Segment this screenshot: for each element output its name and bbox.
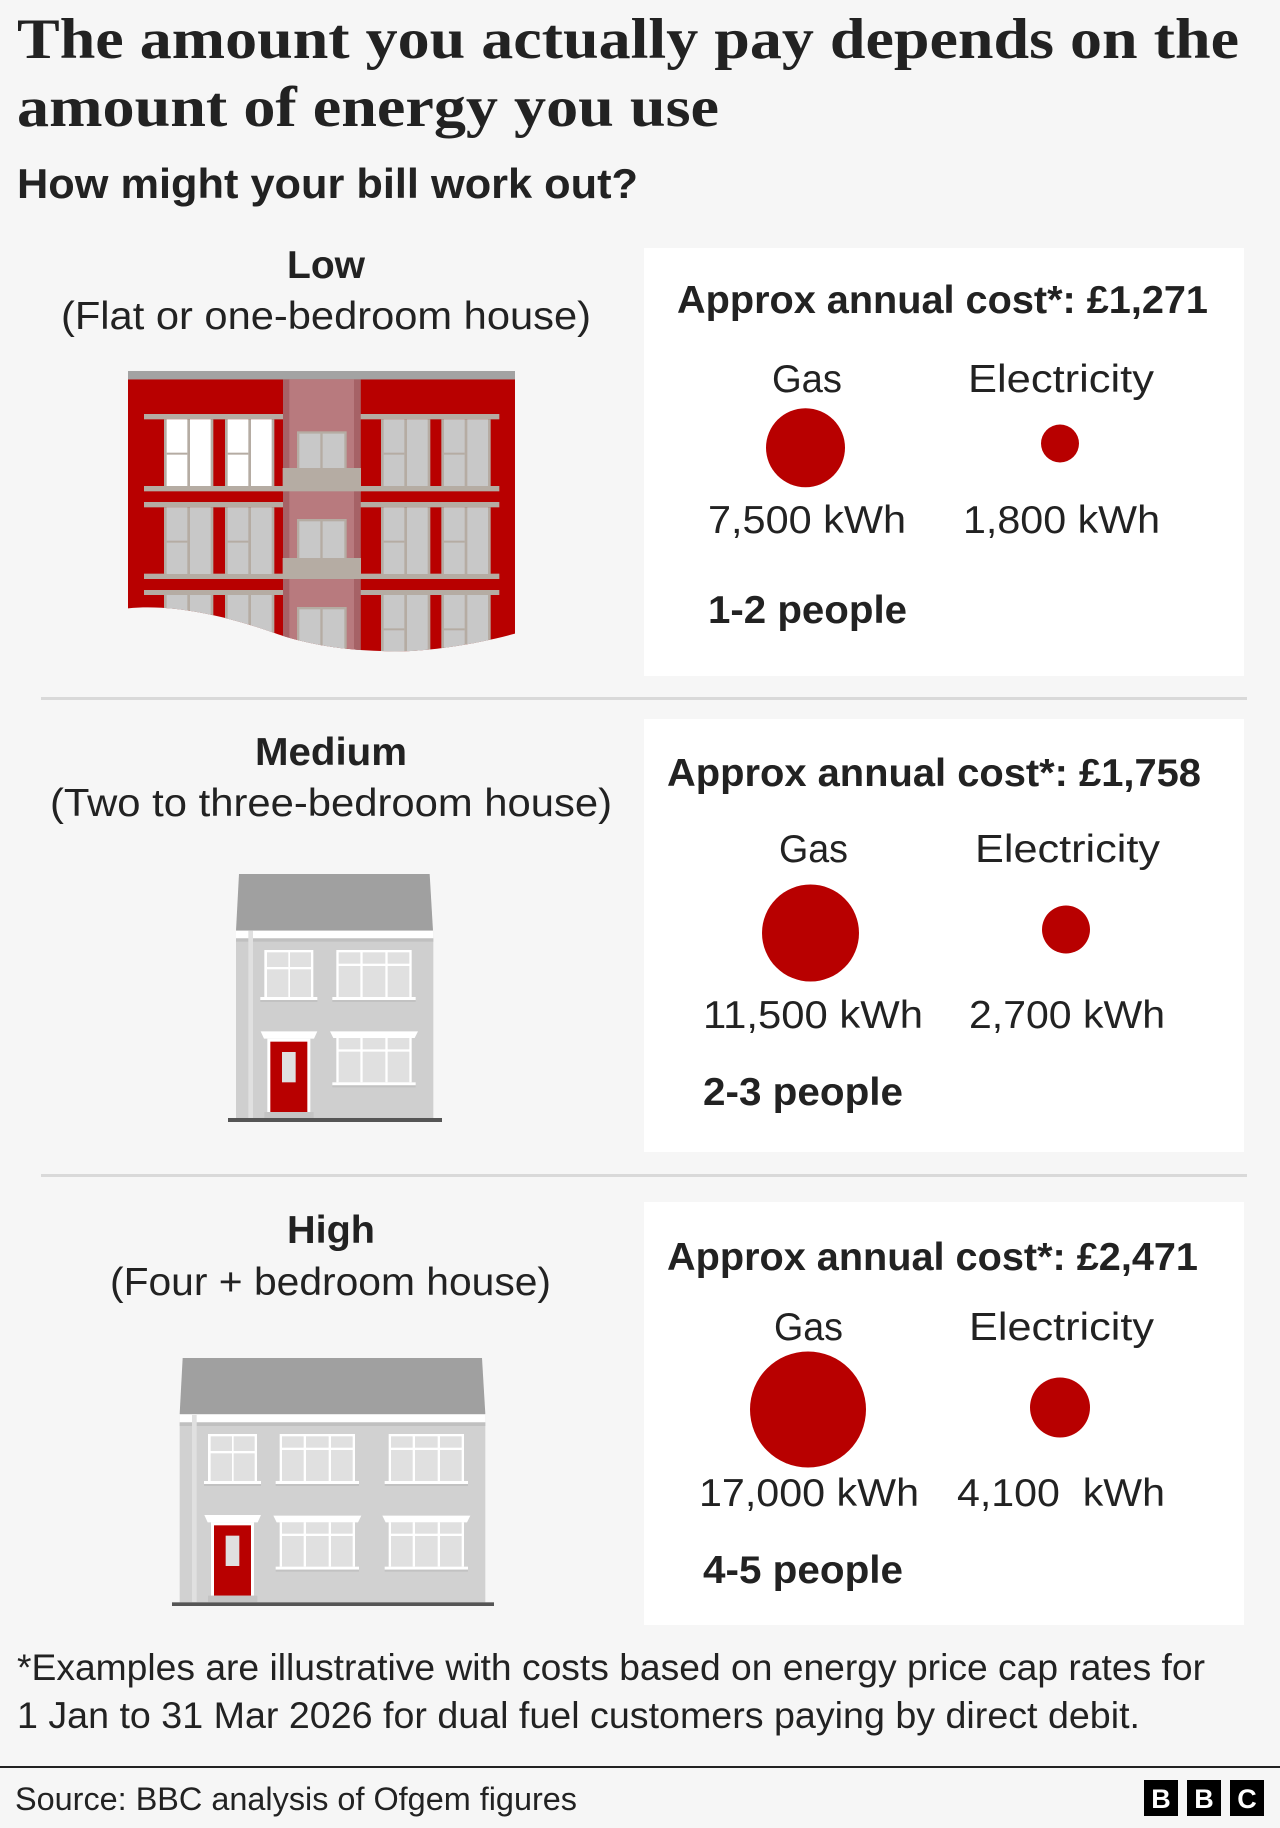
panel: medium annual cost [644,719,1244,1152]
panel: low annual cost [644,248,1244,676]
gas kWh: 7,500 kWh [708,499,906,542]
gas kWh: 17,000 kWh [699,1472,919,1515]
cost heading: Approx annual cost*: £1,758 [667,752,1201,795]
gas circle [762,884,859,982]
heading: high: (Four + bedroom house) [110,1261,551,1304]
heading: medium: (Two to three-bedroom house) [50,782,612,825]
BBC logo: C [1237,1784,1257,1814]
electricity circle [1042,906,1090,954]
heading: low [61,244,591,338]
footnote: *Examples are illustrative with costs based on energy price cap rates for [17,1647,1205,1688]
electricity kWh: 1,800 kWh [963,499,1160,542]
subtitle: How might your bill work out? [17,160,638,207]
BBC logo: B [1151,1784,1171,1814]
people: 4-5 people [703,1549,903,1592]
BBC logo: B [1194,1784,1214,1814]
heading: low: Low [287,244,366,287]
source: Source: BBC analysis of Ofgem figures [15,1781,577,1817]
electricity label: Electricity [969,1306,1155,1349]
gas circle [750,1352,866,1468]
section: high usage [110,1202,1244,1625]
people: 2-3 people [703,1071,903,1114]
icon: large detached house [172,1358,494,1606]
gas label: Gas [779,828,848,871]
footnote [17,1647,1205,1736]
gas label: Gas [772,358,842,401]
electricity circle [1041,424,1079,462]
gas kWh: 11,500 kWh [703,994,923,1037]
cost heading: Approx annual cost*: £1,271 [677,279,1208,322]
footnote: 1 Jan to 31 Mar 2026 for dual fuel customers paying by direct debit. [17,1695,1140,1736]
BBC logo [1144,1780,1264,1816]
gas circle [766,408,845,487]
icon: two-storey small house [228,874,442,1122]
panel: high annual cost [644,1202,1244,1625]
title: amount of energy you use [17,76,719,139]
icon: block of flats [128,371,515,662]
people: 1-2 people [708,589,907,632]
electricity circle [1030,1378,1090,1438]
electricity kWh: 4,100 kWh [957,1472,1165,1515]
gas label: Gas [774,1306,843,1349]
title: The amount you actually pay depends on the [17,8,1239,71]
heading: high [110,1209,551,1304]
electricity label: Electricity [968,358,1155,401]
section: low usage [61,244,1244,676]
title [17,8,1239,139]
heading: medium [50,731,612,825]
heading: medium: Medium [255,731,407,774]
section: medium usage [50,719,1244,1152]
cost heading: Approx annual cost*: £2,471 [667,1236,1198,1279]
electricity label: Electricity [975,828,1161,871]
electricity kWh: 2,700 kWh [969,994,1165,1037]
heading: low: (Flat or one-bedroom house) [61,295,591,338]
heading: high: High [287,1209,375,1252]
